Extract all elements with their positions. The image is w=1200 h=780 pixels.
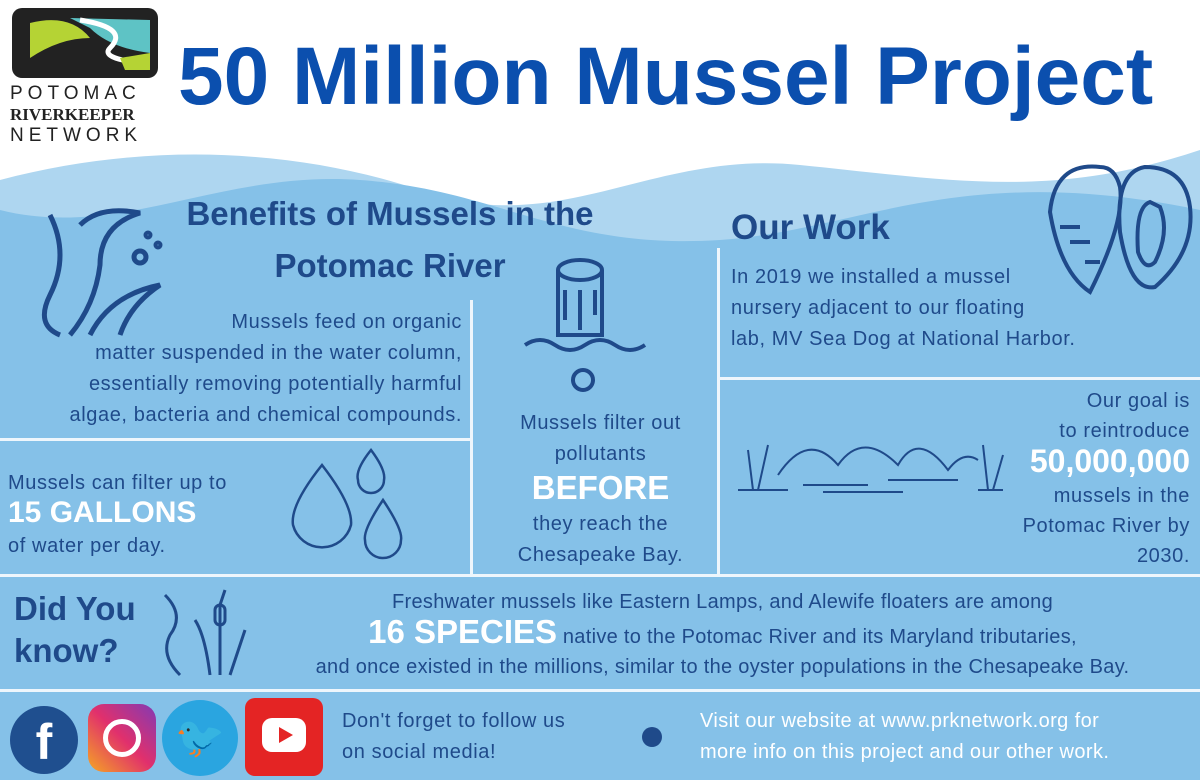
text: feed: algae, bacteria and chemical compounds. bbox=[69, 404, 462, 426]
text: goal: to reintroduce bbox=[1059, 420, 1190, 442]
logo: POTOMAC bbox=[10, 83, 141, 104]
text: gallons: Mussels can filter up to bbox=[8, 472, 227, 494]
logo: NETWORK bbox=[10, 125, 142, 146]
text: gallons: of water per day. bbox=[8, 535, 166, 557]
text: website bbox=[700, 710, 1109, 763]
text: our work: In 2019 we installed a mussel bbox=[731, 266, 1011, 288]
text: goal: mussels in the bbox=[1054, 485, 1190, 507]
heading: benefits bbox=[186, 195, 594, 284]
text: feed: Mussels feed on organic bbox=[231, 311, 462, 333]
text: gallons: 15 GALLONS bbox=[8, 496, 196, 529]
text: gallons bbox=[8, 472, 227, 557]
icons: social: 🐦 bbox=[175, 716, 225, 760]
dividers bbox=[470, 300, 473, 575]
text: feed bbox=[69, 311, 462, 426]
logo bbox=[10, 8, 158, 146]
text: species: 16 SPECIES native to the Potomac River and its Maryland tributaries, bbox=[368, 613, 1077, 650]
text: before: they reach the bbox=[533, 513, 668, 535]
title: 50 Million Mussel Project bbox=[178, 31, 1153, 122]
text: before: Mussels filter out bbox=[520, 412, 681, 434]
text: our work: nursery adjacent to our floating bbox=[731, 297, 1025, 319]
text: goal: 50,000,000 bbox=[1030, 443, 1190, 479]
bullet bbox=[642, 727, 662, 747]
icon: hills landscape bbox=[738, 444, 1004, 493]
logo: RIVERKEEPER bbox=[10, 105, 135, 124]
heading: benefits: Potomac River bbox=[274, 247, 506, 284]
heading: did you know: Did You bbox=[14, 590, 136, 627]
icon: seaweed bbox=[42, 208, 162, 338]
text: before bbox=[518, 412, 683, 566]
text: goal: Our goal is bbox=[1087, 390, 1190, 412]
text: before: BEFORE bbox=[532, 469, 669, 506]
text: species: Freshwater mussels like Eastern Lamps, and Alewife floaters are among bbox=[392, 591, 1053, 613]
icons: social: f bbox=[36, 714, 52, 770]
heading: our work: Our Work bbox=[731, 208, 890, 247]
icon: cattails bbox=[164, 590, 246, 676]
icon: drops bbox=[292, 448, 402, 560]
text: before: Chesapeake Bay. bbox=[518, 544, 683, 566]
icon: mussel shells bbox=[1048, 164, 1193, 295]
text: website: Visit our website at www.prknetwork.org for bbox=[700, 710, 1099, 732]
text: species: and once existed in the millions, similar to the oyster populations in the Chesapeake Bay. bbox=[316, 656, 1129, 678]
text: our work bbox=[731, 266, 1076, 350]
text: follow: on social media! bbox=[342, 741, 496, 763]
heading: benefits: Benefits of Mussels in the bbox=[186, 195, 594, 232]
text: before: pollutants bbox=[555, 443, 646, 465]
text: goal bbox=[1023, 390, 1190, 567]
text: goal: 2030. bbox=[1137, 545, 1190, 567]
text: feed: matter suspended in the water column, bbox=[95, 342, 462, 364]
text: follow: Don't forget to follow us bbox=[342, 710, 565, 732]
icon: pipe pollution bbox=[524, 258, 646, 392]
text: feed: essentially removing potentially harmful bbox=[89, 373, 462, 395]
text: our work: lab, MV Sea Dog at National Harbor. bbox=[731, 328, 1076, 350]
heading: did you know: know? bbox=[14, 632, 118, 669]
text: species bbox=[316, 591, 1129, 678]
text: website: more info on this project and our other work. bbox=[700, 741, 1109, 763]
text: follow bbox=[342, 710, 565, 763]
heading: did you know bbox=[14, 590, 136, 669]
icons: social bbox=[10, 698, 323, 776]
text: goal: Potomac River by bbox=[1023, 515, 1190, 537]
